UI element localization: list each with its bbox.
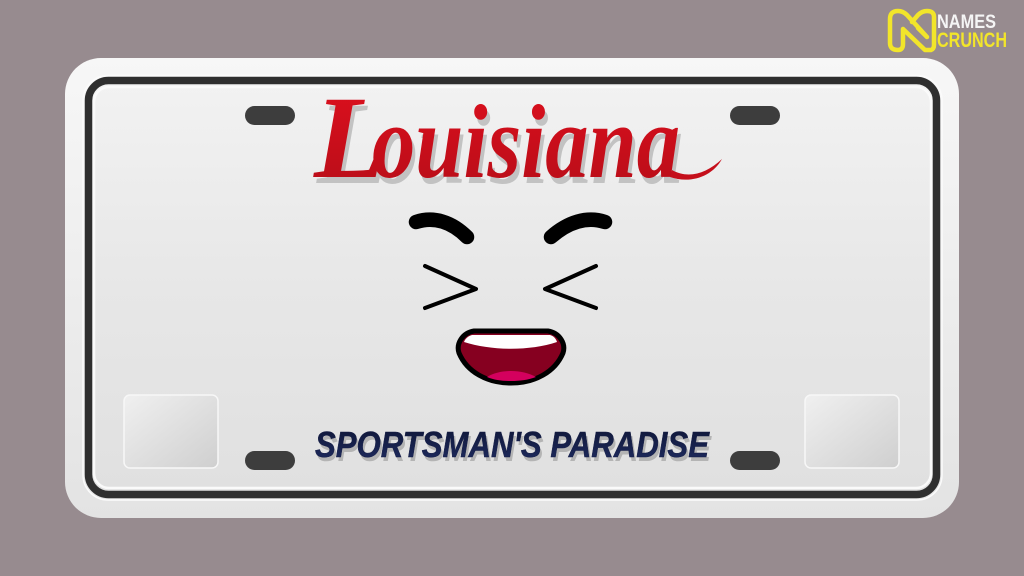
title tail flourish <box>670 159 722 180</box>
license plate <box>65 58 959 518</box>
logo icon <box>890 11 934 50</box>
sticker: left <box>124 395 218 468</box>
tongue <box>487 371 536 381</box>
face <box>416 220 605 383</box>
plate dark border <box>88 80 936 494</box>
slogan: SPORTSMAN'S PARADISE <box>317 428 712 469</box>
title: Louisiana: L <box>313 72 386 203</box>
left eye <box>425 266 476 308</box>
title: Louisiana <box>313 72 683 209</box>
mouth <box>458 331 564 383</box>
logo text: NAMES: NAMES <box>937 12 996 33</box>
plate outer body <box>65 58 959 518</box>
teeth <box>464 335 557 349</box>
title: Louisiana: ouisiana <box>375 89 683 206</box>
mounting slot: bottom left <box>245 451 295 470</box>
slogan: SPORTSMAN'S PARADISE <box>315 424 710 465</box>
sticker: right <box>805 395 899 468</box>
left eyebrow <box>416 220 467 237</box>
title: Louisiana: L <box>316 78 389 209</box>
right eye <box>545 266 596 308</box>
logo: Names Crunch <box>890 11 1007 52</box>
mounting slot: bottom right <box>730 451 780 470</box>
plate outer white edge <box>83 76 942 500</box>
right eyebrow <box>551 220 605 237</box>
plate inner white line <box>94 87 931 488</box>
title: Louisiana: ouisiana <box>372 83 680 200</box>
mounting slot: top left <box>245 106 295 125</box>
mouth interior <box>458 331 564 383</box>
mounting slot: top right <box>730 106 780 125</box>
